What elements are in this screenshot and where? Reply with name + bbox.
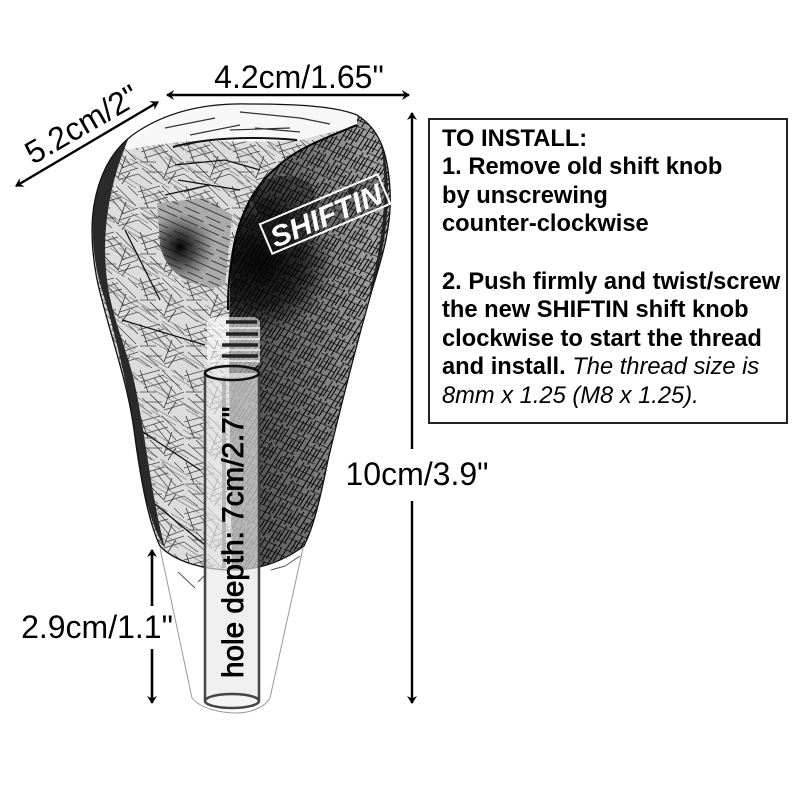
step 1 text: by unscrewing (442, 183, 608, 209)
step 2 text: the new SHIFTIN shift knob (442, 297, 749, 323)
step 2 text: 2. Push firmly and twist/screw (442, 269, 780, 295)
knob collar cone (160, 548, 303, 713)
knob outline (92, 104, 390, 570)
dimension: top width: 4.2cm/1.65" (214, 59, 384, 95)
knob body (85, 100, 395, 575)
hole depth label: hole depth: 7cm/2.7" (217, 407, 250, 678)
stray sketch strokes (178, 556, 300, 588)
step 2 text (442, 269, 780, 409)
step 1 text: counter-clockwise (442, 211, 649, 237)
threaded insert (207, 317, 260, 367)
logo screw (346, 186, 356, 196)
step 2 text: clockwise to start the thread (442, 326, 762, 352)
gear knob illustration (85, 100, 395, 713)
step 2 text: and install. The thread size is (442, 354, 759, 380)
top cap (125, 126, 350, 150)
install instructions panel (428, 118, 788, 424)
SHIFTIN logo: SHIFTIN (266, 178, 389, 255)
left face hatching (92, 128, 346, 569)
heading: to install: TO INSTALL: (442, 126, 587, 152)
dimension: total height: 10cm/3.9" (346, 456, 488, 492)
face divider line (228, 125, 357, 310)
step 2 text: 8mm x 1.25 (M8 x 1.25). (442, 383, 699, 409)
right face hatching (229, 116, 390, 570)
step 1 text: 1. Remove old shift knob (442, 154, 722, 180)
dimension: depth: 5.2cm/2" (18, 77, 145, 171)
step 1 text (442, 154, 722, 237)
dimension: collar height: 2.9cm/1.1" (21, 609, 173, 645)
hole tube (205, 366, 259, 708)
cavity shading (157, 198, 232, 288)
side edge shadow (93, 135, 165, 548)
